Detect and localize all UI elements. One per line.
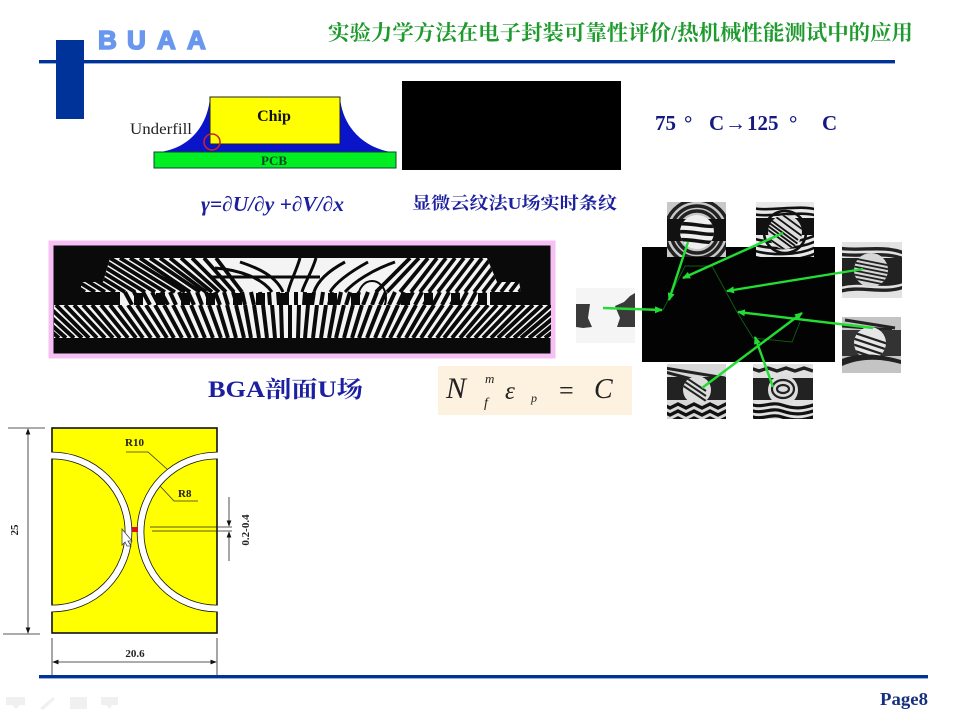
left curved slot	[48, 456, 128, 608]
footer	[6, 675, 928, 710]
gap label: 0.2-0.4	[240, 514, 252, 546]
slide title: 实验力学方法在电子封装可靠性评价/热机械性能测试中的应用	[328, 21, 913, 45]
chip fringes	[81, 258, 521, 305]
formula terms: =	[559, 376, 574, 405]
formula terms: p	[530, 391, 537, 405]
shear strain formula: γ=∂U/∂y +∂V/∂x	[201, 192, 344, 216]
formula terms: ε	[505, 378, 515, 405]
PCB: PCB	[261, 153, 287, 168]
pink frame	[51, 243, 553, 356]
header	[39, 21, 913, 119]
thumbnail: left	[576, 288, 635, 343]
underfill label: Underfill	[130, 121, 193, 138]
width label: 20.6	[125, 648, 145, 660]
mouse cursor	[122, 529, 132, 546]
temperature range: C	[822, 111, 837, 135]
red circle marker	[204, 134, 220, 150]
formula terms: f	[484, 396, 490, 411]
solder balls	[134, 293, 487, 305]
green arrows	[603, 233, 873, 388]
BGA cross-section fringe image	[2, 243, 587, 356]
fatigue formula	[438, 366, 632, 415]
thumbnail: top right	[756, 202, 814, 257]
thumbnail: bottom right	[753, 364, 813, 419]
width dimension	[52, 638, 217, 677]
red gauge section	[132, 527, 138, 532]
gap dimension	[150, 497, 232, 561]
BGA caption: BGA剖面U场	[208, 377, 363, 402]
chip	[210, 97, 340, 144]
slideshow controls	[6, 697, 118, 710]
temperature range: °	[684, 111, 692, 135]
temperature range: 75	[655, 111, 676, 135]
leader R8: R8	[178, 488, 192, 500]
logo text: BUAA: BUAA	[98, 25, 206, 55]
height dimension	[3, 428, 45, 634]
thumbnail: top left	[667, 202, 726, 257]
specimen drawing	[3, 428, 252, 677]
leader R8	[160, 486, 198, 501]
black fringe image	[402, 81, 621, 170]
thumbnail: bottom left	[667, 364, 726, 419]
right curved slot	[140, 456, 221, 608]
formula terms: C	[594, 374, 613, 405]
leader R10	[125, 437, 167, 469]
board fringes	[54, 305, 551, 338]
temperature range: C	[709, 111, 724, 135]
circled solder joint	[358, 281, 386, 315]
leader R10: R10	[125, 437, 144, 449]
underfill fillet	[160, 97, 392, 152]
temperature range: 125	[747, 111, 778, 135]
formula terms: m	[485, 371, 494, 386]
header rule and blue block	[39, 40, 895, 119]
chip: Chip	[257, 108, 291, 125]
formula terms	[445, 371, 613, 411]
thumbnail: right lower	[842, 317, 901, 373]
package outline	[663, 266, 800, 342]
underfill diagram	[130, 97, 396, 168]
formula background	[438, 366, 632, 415]
height label: 25	[9, 524, 21, 536]
temperature range: →	[725, 111, 746, 135]
yellow specimen	[52, 428, 217, 633]
moire caption: 显微云纹法U场实时条纹	[412, 193, 617, 213]
temperature range: °	[789, 111, 797, 135]
moire package map	[576, 200, 906, 422]
thumbnail: right upper	[842, 242, 902, 298]
page number: Page8	[880, 689, 928, 709]
footer rule	[39, 675, 928, 678]
PCB	[154, 152, 396, 168]
formula terms: N	[445, 372, 468, 405]
black package image	[642, 247, 835, 362]
